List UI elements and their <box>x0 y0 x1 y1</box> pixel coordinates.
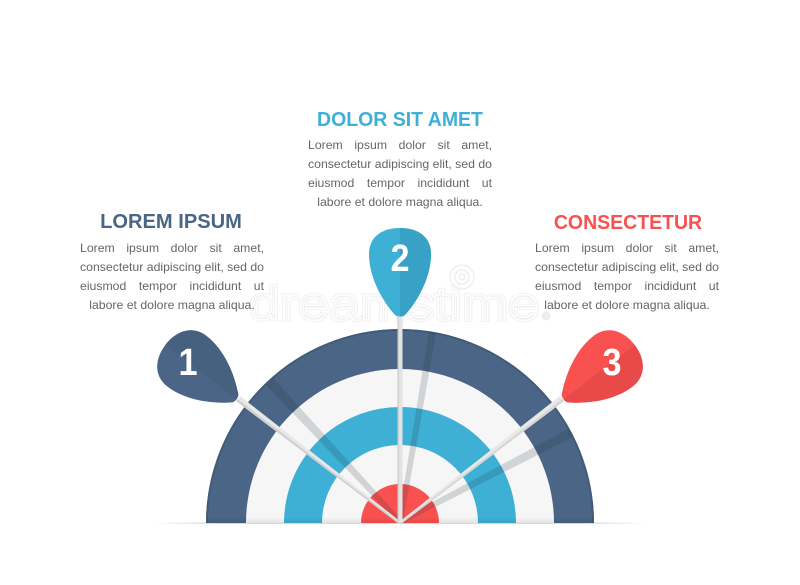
text block: dolor sit amet: eiusmod tempor incididunt ut <box>308 176 492 190</box>
watermark: dreamstime <box>249 277 539 330</box>
text block: dolor sit amet: consectetur adipiscing elit, sed do <box>308 157 492 171</box>
text block: lorem ipsum: consectetur adipiscing elit, sed do <box>80 260 264 274</box>
heading: dolor sit amet: DOLOR SIT AMET <box>317 108 483 131</box>
text block: consectetur: consectetur adipiscing elit, sed do <box>535 260 719 274</box>
text block: consectetur <box>535 241 719 312</box>
text block: lorem ipsum: labore et dolore magna aliqua. <box>89 298 255 312</box>
heading: lorem ipsum: LOREM IPSUM <box>100 210 242 233</box>
text block: consectetur: labore et dolore magna aliqua. <box>544 298 710 312</box>
ground line <box>155 522 645 524</box>
text block: consectetur: Lorem ipsum dolor sit amet, <box>535 241 719 255</box>
text block: dolor sit amet: labore et dolore magna aliqua. <box>317 195 483 209</box>
text block: lorem ipsum <box>80 241 264 312</box>
text block: lorem ipsum: Lorem ipsum dolor sit amet, <box>80 241 264 255</box>
text block: lorem ipsum: eiusmod tempor incididunt ut <box>80 279 264 293</box>
watermark <box>249 265 550 330</box>
text block: consectetur: eiusmod tempor incididunt ut <box>535 279 719 293</box>
text block: dolor sit amet: Lorem ipsum dolor sit amet, <box>308 138 492 152</box>
dart 3: 3 <box>602 340 622 383</box>
heading: consectetur: CONSECTETUR <box>554 211 702 234</box>
dart shadows <box>266 331 573 524</box>
dart 1: 1 <box>178 340 198 383</box>
dart 2: 2 <box>390 236 410 279</box>
watermark: dreamstime <box>249 277 539 330</box>
dart 1 <box>146 319 401 524</box>
dart 2 <box>369 228 431 523</box>
text block: dolor sit amet <box>308 138 492 209</box>
dartboard <box>206 329 594 524</box>
dart 3 <box>399 319 654 524</box>
